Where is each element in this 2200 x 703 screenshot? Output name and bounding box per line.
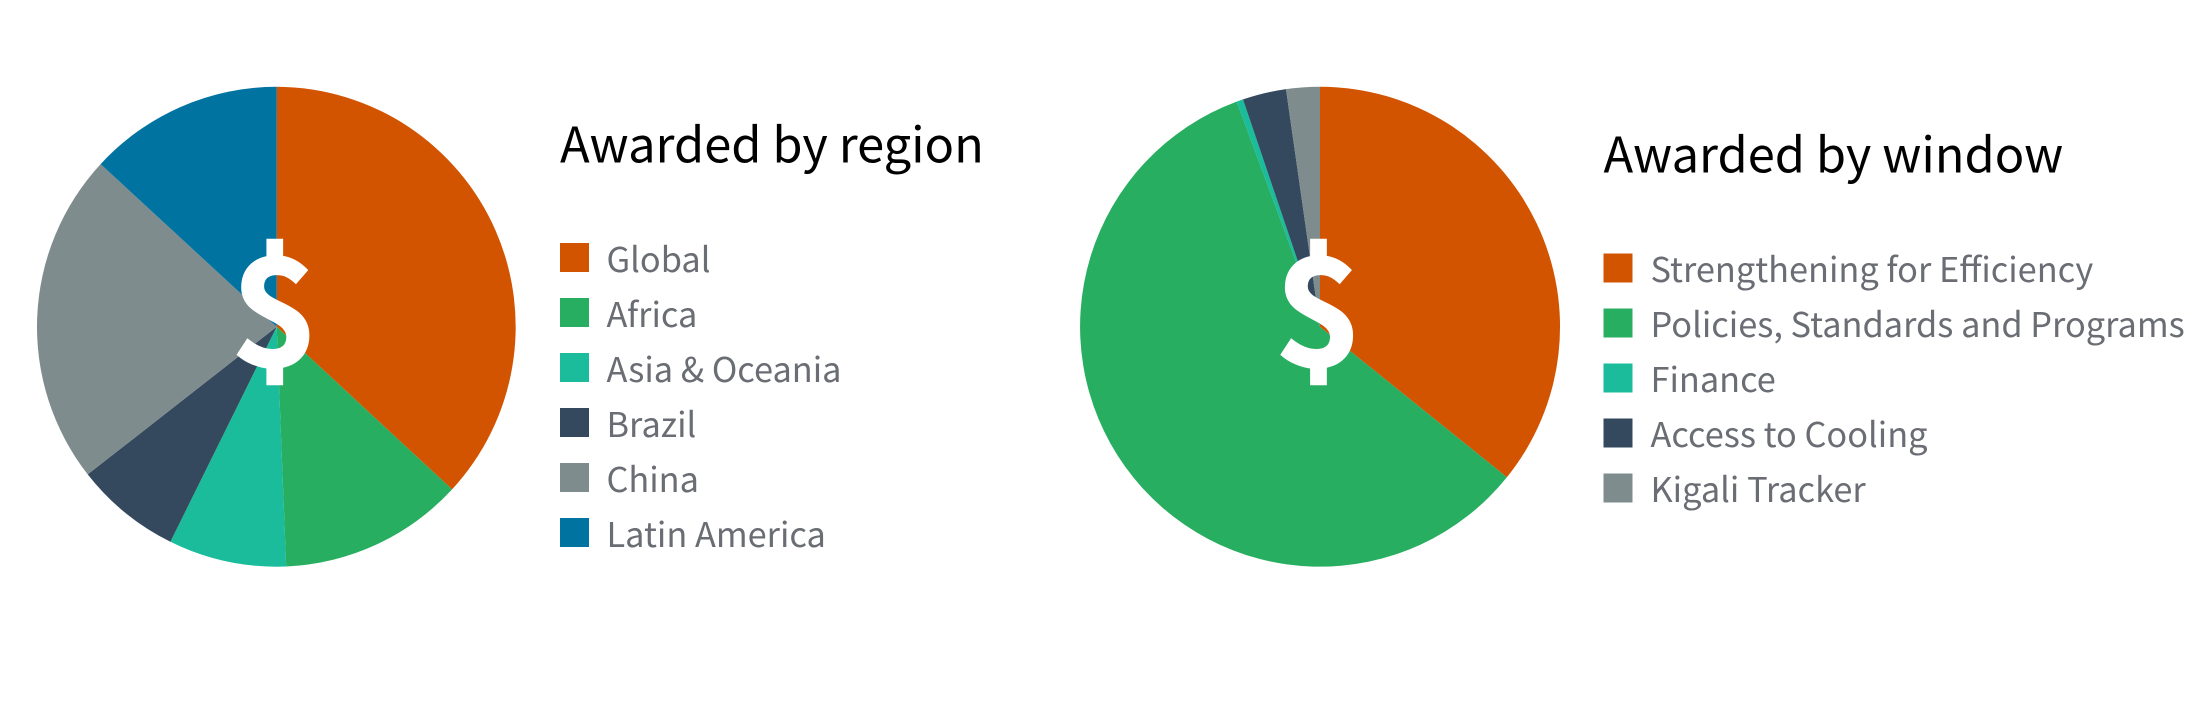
slice: Finance: [1237, 99, 1320, 327]
legend item: Latin America: Latin America: [606, 507, 826, 557]
legend item: Brazil: Brazil: [606, 397, 696, 447]
pie chart: awarded by window: [1080, 87, 1560, 567]
icon: dollar sign: $: [1274, 193, 1362, 409]
slice: China: [37, 164, 277, 474]
legend item: Brazil: [560, 397, 696, 447]
legend item: Africa: [560, 287, 697, 337]
slice: Asia & Oceania: [170, 327, 286, 567]
legend item: Asia & Oceania: Asia & Oceania: [606, 342, 841, 392]
legend item: Access to Cooling: Access to Cooling: [1650, 407, 1928, 457]
heading: awarded by region: Awarded by region: [560, 106, 984, 178]
icon: dollar sign: $: [231, 193, 319, 409]
legend item: Global: Global: [606, 232, 710, 282]
legend item: Global: [560, 232, 710, 282]
legend item: China: [560, 452, 699, 502]
slice: Brazil: [88, 327, 277, 542]
pie chart: awarded by region: [37, 87, 516, 567]
legend item: China: China: [606, 452, 699, 502]
slice: Strengthening for Efficiency: [1320, 87, 1560, 477]
slice: Africa: [277, 327, 452, 566]
slice: Access to Cooling: [1243, 89, 1320, 327]
legend item: Policies, Standards and Programs: Policies, Standards and Programs: [1650, 297, 2185, 347]
slice: Kigali Tracker: [1286, 87, 1320, 327]
heading: awarded by window: Awarded by window: [1604, 116, 2063, 188]
legend item: Finance: Finance: [1650, 352, 1776, 402]
slice: Latin America: [101, 87, 277, 327]
legend item: Strengthening for Efficiency: Strengthening for Efficiency: [1650, 242, 2093, 292]
slice: Policies, Standards and Programs: [1080, 102, 1507, 567]
legend: window: [1604, 242, 2185, 512]
legend item: Africa: Africa: [606, 287, 697, 337]
legend: region: [560, 232, 841, 557]
slice: Global: [277, 87, 516, 489]
legend item: Kigali Tracker: Kigali Tracker: [1650, 462, 1866, 512]
